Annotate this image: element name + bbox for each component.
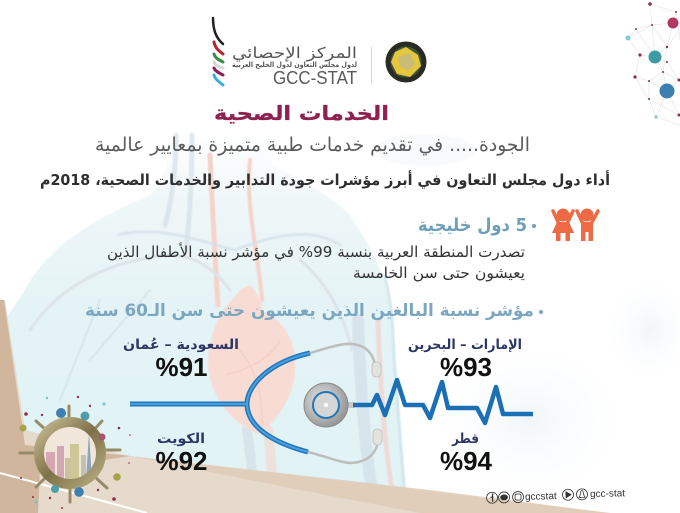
title: الخدمات الصحية bbox=[214, 101, 389, 125]
stat: Saudi Arabia and Oman: السعودية – عُمان bbox=[123, 337, 239, 353]
stat: Qatar: قطر bbox=[451, 431, 479, 447]
wheel: coloured balls bbox=[20, 408, 121, 497]
stat: Kuwait bbox=[155, 431, 208, 476]
handle: gccstat: gccstat bbox=[525, 491, 557, 503]
bullet: adults indicator heading: مؤشر نسبة البالغين الذين يعيشون حتى سن الـ60 سنة bbox=[85, 301, 534, 321]
stat: UAE and Bahrain: %93 bbox=[440, 352, 492, 382]
logo: Arabic name: المركز الإحصائي bbox=[232, 44, 357, 63]
wheel: network dots bbox=[20, 396, 131, 509]
decoration: network top right bbox=[626, 2, 680, 125]
background: beige lower band bbox=[0, 300, 610, 513]
handle: gcc-stat: gcc-stat bbox=[590, 488, 625, 500]
background: human body silhouette bbox=[5, 128, 475, 513]
icons: facebook, twitter, instagram bbox=[486, 491, 524, 503]
stat: Qatar: %94 bbox=[440, 446, 493, 476]
wheel: ring and skyline bbox=[34, 417, 106, 489]
logo divider bbox=[371, 47, 372, 84]
icon: children bbox=[552, 208, 598, 241]
decoration: ship wheel with skyline bbox=[20, 396, 131, 509]
social media handles bbox=[486, 488, 625, 504]
text block: children indicator bbox=[107, 242, 525, 282]
logo: Arabic subtitle: لدول مجلس التعاون لدول الخليج العربية bbox=[232, 61, 357, 69]
wheel: spokes bbox=[20, 406, 120, 502]
heading: GCC performance: أداء دول مجلس التعاون في أبرز مؤشرات جودة التدابير والخدمات الصحية، 2018م bbox=[40, 170, 610, 189]
background: faint cloud right bbox=[420, 270, 680, 510]
text block: children indicator: تصدرت المنطقة العربية بنسبة 99% في مؤشر نسبة الأطفال الذين bbox=[107, 242, 525, 262]
illustration: faint heart bbox=[208, 285, 295, 434]
stethoscope: gray tubes bbox=[308, 344, 377, 463]
bullet: five Gulf states: 5 دول خليجية bbox=[418, 215, 527, 236]
stethoscope: blue tubes bbox=[130, 353, 310, 452]
stat: UAE and Bahrain: الإمارات – البحرين bbox=[408, 337, 522, 353]
subtitle: الجودة..... في تقديم خدمات طبية متميزة بمعايير عالمية bbox=[95, 134, 530, 156]
logo: GCC emblem bbox=[386, 42, 426, 82]
text block: children indicator: يعيشون حتى سن الخامسة bbox=[353, 264, 525, 282]
stat: Qatar bbox=[440, 431, 493, 476]
ECG line bbox=[353, 380, 533, 423]
stethoscope: chest piece bbox=[304, 383, 355, 427]
stat: UAE and Bahrain bbox=[408, 337, 522, 382]
stat: Saudi Arabia and Oman bbox=[123, 337, 239, 382]
logo: ribbon mark bbox=[213, 18, 223, 85]
stat: Saudi Arabia and Oman: %91 bbox=[155, 352, 208, 382]
logo: GCC-STAT wordmark: GCC-STAT bbox=[273, 68, 357, 88]
stat: Kuwait: الكويت bbox=[157, 431, 205, 447]
icons: youtube, snapchat bbox=[562, 489, 588, 500]
stat: Kuwait: %92 bbox=[155, 446, 208, 476]
stethoscope bbox=[130, 344, 382, 463]
stethoscope: ear tips bbox=[372, 362, 382, 445]
logo: GCC-STAT bbox=[213, 18, 357, 88]
